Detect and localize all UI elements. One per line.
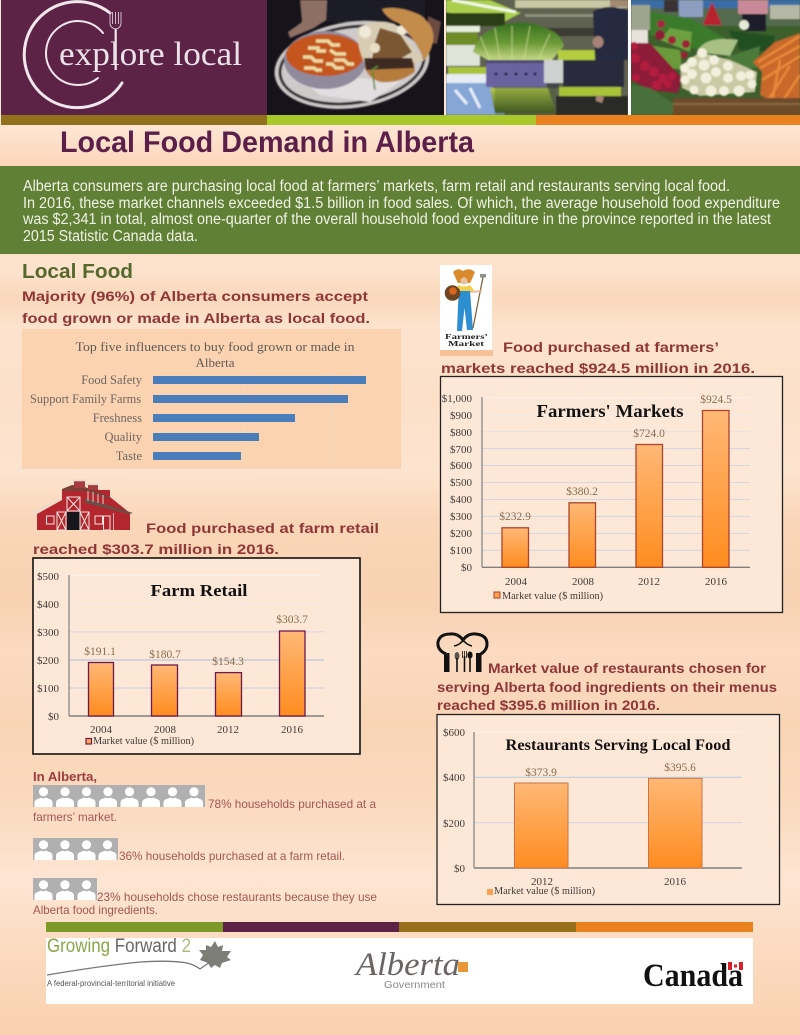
stat: 23 percent: Alberta food ingredients.	[33, 903, 158, 917]
subheading: majority accept local food: Majority (96%) of Alberta consumers accept	[22, 288, 368, 304]
logo: Growing Forward 2	[47, 936, 231, 988]
footer logos panel	[46, 936, 753, 1004]
chart: farmers' markets: $200	[450, 528, 472, 540]
colour band under banner	[1, 115, 800, 125]
icon: farmers' market logo: Farmers’	[445, 332, 488, 341]
chart: farmers' markets: Market value ($ million)	[502, 591, 603, 602]
bar chart: top five influencers: Food Safety	[81, 373, 143, 387]
stat: 78 percent: farmers’ market.	[33, 810, 117, 824]
chart: farmers' markets: $924.5	[700, 393, 732, 406]
chart: farm retail: $500	[37, 571, 60, 583]
chart: restaurants serving local food: Market value ($ million)	[494, 886, 595, 897]
stat: 23 percent	[33, 890, 377, 917]
chart: farm retail: Farm Retail	[150, 581, 248, 600]
subheading: majority accept local food: food grown or made in Alberta as local food.	[22, 310, 370, 326]
chart: farm retail: 2016	[281, 724, 304, 736]
heading: Local Food: Local Food	[22, 261, 133, 283]
chart: farmers' markets: 2016	[705, 576, 728, 588]
stat: 23 percent: 23% households chose restaurants because they use	[97, 890, 377, 904]
chart: farmers' markets: $400	[450, 494, 472, 506]
icon strip: eight people	[33, 785, 205, 807]
chart: farmers' markets: $700	[450, 444, 472, 456]
chart: farmers' markets: $0	[461, 562, 472, 574]
logo panel: explore local: explore local	[59, 36, 242, 73]
subheading: farmers' markets: markets reached $924.5 million in 2016.	[441, 360, 755, 376]
subheading: farmers' markets	[441, 339, 755, 376]
logo: Alberta Government: Alberta	[354, 947, 460, 983]
chart: farm retail: 2012	[217, 724, 239, 736]
chart: farm retail: $0	[48, 711, 60, 723]
logo: Growing Forward 2: A federal-provincial-territorial initiative	[47, 979, 176, 988]
photo: market vegetables	[630, 0, 800, 115]
bar chart: top five influencers	[22, 329, 401, 469]
label: In Alberta: In Alberta,	[33, 769, 97, 784]
chart: farmers' markets: $232.9	[499, 510, 531, 523]
subheading: farm retail: Food purchased at farm retail	[146, 520, 379, 536]
chart: restaurants serving local food: $395.6	[664, 761, 696, 774]
chart: farm retail: $100	[37, 683, 60, 695]
icon: red barn	[33, 480, 133, 530]
chart: restaurants serving local food: $400	[443, 772, 466, 784]
bar chart: top five influencers: Support Family Farms	[30, 392, 141, 406]
chart: farmers' markets: Farmers' Markets	[536, 401, 684, 421]
chart: farmers' markets: 2012	[638, 576, 660, 588]
header banner	[1, 0, 800, 118]
chart: farmers' markets: $600	[450, 460, 472, 472]
intro text panel: 2015 Statistic Canada data.	[23, 228, 198, 245]
stat: 36 percent: 36% households purchased at a farm retail.	[119, 849, 345, 863]
stat: 78 percent	[33, 797, 376, 824]
logo panel: explore local	[1, 0, 267, 115]
household statistics	[33, 769, 377, 917]
subheading: restaurants: serving Alberta food ingredients on their menus	[437, 679, 777, 695]
logo: Canada wordmark: Canada	[643, 958, 743, 994]
bar chart: top five influencers: Top five influencers to buy food grown or made in	[76, 339, 355, 354]
stat: 78 percent: 78% households purchased at a	[208, 797, 376, 811]
chart: restaurants serving local food: $600	[443, 727, 466, 739]
bar chart: top five influencers: Alberta	[196, 355, 235, 370]
subheading: farm retail: reached $303.7 million in 2016.	[33, 541, 279, 557]
subheading: restaurants: Market value of restaurants chosen for	[488, 660, 767, 676]
icon: farmers' market logo: Market	[448, 339, 485, 348]
footer colour band	[46, 922, 753, 932]
subheading: restaurants	[437, 660, 777, 713]
subheading: majority accept local food	[22, 288, 370, 326]
bar chart: top five influencers: Taste	[116, 449, 142, 463]
chart: farmers' markets: $100	[450, 545, 472, 557]
chart: restaurants serving local food	[437, 714, 780, 904]
chart: farmers' markets: $380.2	[566, 485, 598, 498]
icon strip: three people	[33, 878, 97, 900]
chart: farmers' markets: $900	[450, 410, 472, 422]
title: Local Food Demand in Alberta	[60, 126, 474, 159]
chart: farm retail: $300	[37, 627, 60, 639]
subheading: restaurants: reached $395.6 million in 2016.	[437, 697, 660, 713]
chart: farmers' markets: $1,000	[442, 393, 472, 405]
subheading: farmers' markets: Food purchased at farmers’	[503, 339, 719, 355]
icon: chef hat with cutlery	[438, 634, 487, 672]
icon: farmers' market logo	[440, 265, 493, 356]
intro text panel	[0, 166, 800, 254]
chart: farm retail: $154.3	[212, 655, 244, 668]
icon strip: four people	[33, 838, 118, 860]
bar chart: top five influencers: Freshness	[93, 411, 142, 425]
chart: farm retail: $180.7	[149, 648, 181, 661]
logo: Growing Forward 2: Growing Forward 2	[47, 936, 191, 957]
photo: soup and sandwich	[267, 0, 444, 118]
bar chart: top five influencers: Quality	[104, 430, 143, 444]
intro text panel: Alberta consumers are purchasing local food at farmers’ markets, farm retail and restaurants serving local food.	[23, 178, 730, 195]
chart: restaurants serving local food: $0	[454, 863, 466, 875]
chart: farmers' markets: $724.0	[633, 427, 665, 440]
chart: farmers' markets: 2008	[572, 576, 594, 588]
chart: restaurants serving local food: $373.9	[525, 766, 557, 779]
chart: farm retail: $200	[37, 655, 60, 667]
chart: farm retail: $400	[37, 599, 60, 611]
chart: restaurants serving local food: 2012	[531, 876, 553, 888]
chart: farm retail: Market value ($ million)	[93, 736, 194, 747]
photo: sprouts	[444, 0, 630, 115]
chart: farm retail	[33, 558, 360, 754]
chart: restaurants serving local food: Restaurants Serving Local Food	[506, 737, 731, 754]
chart: restaurants serving local food: $200	[443, 818, 466, 830]
chart: farm retail: 2004	[90, 724, 112, 736]
chart: farm retail: $303.7	[276, 613, 308, 626]
chart: farmers' markets: $300	[450, 511, 472, 523]
chart: farmers' markets: $800	[450, 427, 472, 439]
chart: farmers' markets	[440, 376, 782, 612]
subheading: farm retail	[33, 520, 379, 557]
chart: farm retail: $191.1	[84, 645, 116, 658]
chart: farmers' markets: $500	[450, 477, 472, 489]
chart: restaurants serving local food: 2016	[664, 876, 686, 888]
chart: farm retail: 2008	[154, 724, 176, 736]
chart: farmers' markets: 2004	[505, 576, 528, 588]
logo: Alberta Government: Government	[384, 979, 445, 991]
